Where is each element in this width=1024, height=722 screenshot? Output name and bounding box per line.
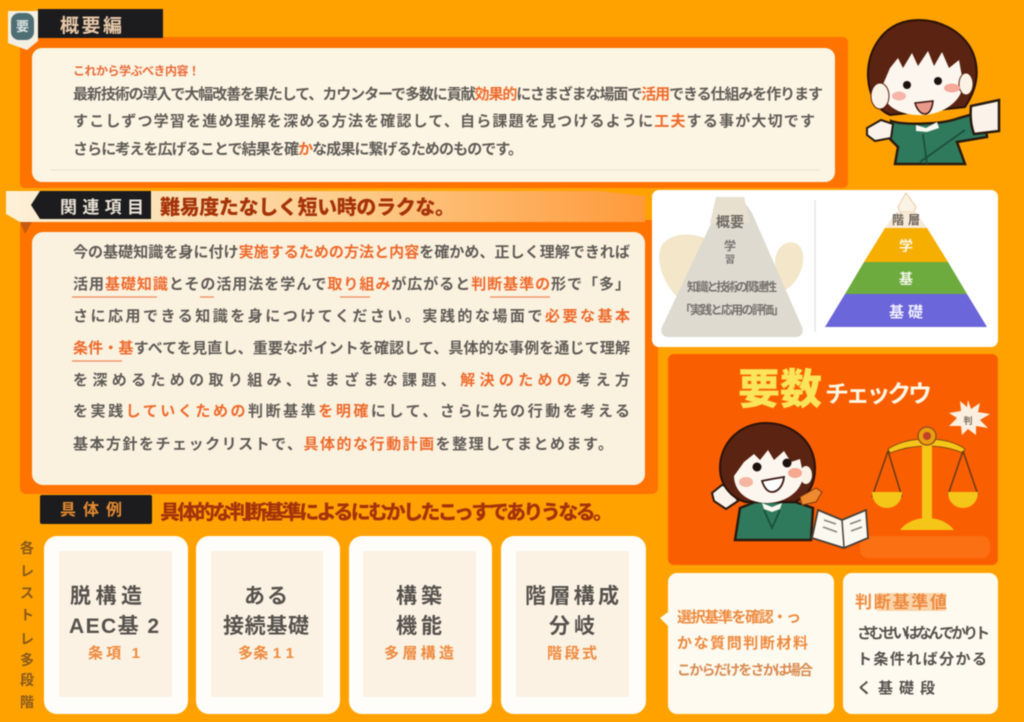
panel: introduction [20, 37, 848, 188]
diagram: muted mountain: 「実践と応用の評価」 [680, 302, 784, 317]
card: three: 構築 [396, 585, 442, 608]
card: one: AEC基 2 [69, 615, 159, 638]
title: key check [738, 366, 932, 413]
card: two: ある [244, 585, 288, 608]
icon: burst [949, 400, 990, 435]
text: introduction body: 最新技術の導入で大幅改善を果たして、カウンターで多数に貢献効果的にさまざまな場面で活用できる仕組みを作ります [73, 85, 823, 103]
card: checklist note: さむせいはなんでかりト [857, 625, 990, 642]
title: key check: 要数 [738, 366, 822, 413]
heading: section three: 具体的な判断基準によるにむかしたこっすでありうなる。 [160, 500, 613, 524]
text: main explanation body: を実践していくための判断基準を明確にして、さらに先の行動を考える [73, 402, 630, 420]
text: vertical note: ト [20, 607, 34, 623]
header: section two ribbon [6, 191, 645, 234]
card: two: 多条 1 1 [238, 644, 294, 662]
card: orange note: かな質問判断材料 [677, 634, 808, 652]
text: vertical note: 階 [20, 694, 34, 710]
character: greeting mascot [867, 20, 999, 164]
text: vertical note [20, 540, 34, 710]
text: vertical note: レ [20, 631, 34, 647]
diagram: colored pyramid: 階層 [892, 213, 920, 227]
text: vertical note: ス [20, 585, 34, 601]
text: main explanation body [73, 243, 630, 453]
text: introduction body: すこしずつ学習を進め理解を深める方法を確認して、自ら課題を見つけるように工夫する事が大切です [73, 112, 815, 130]
text: main explanation body: 条件・基すべてを見直し、重要なポイントを確認して、具体的な事例を通じて理解 [73, 339, 630, 357]
text: main explanation body: 活用基礎知識とその活用法を学んで取り組みが広がると判断基準の形で「多」 [73, 275, 630, 293]
panel: main explanation [20, 220, 658, 494]
diagram: colored pyramid [825, 193, 987, 327]
diagram: colored pyramid: 基 [899, 271, 913, 287]
header: section three: 具体例 [60, 501, 122, 519]
card: checklist note: ト条件れば分かる [857, 651, 987, 668]
card: four: 階層構成 [525, 584, 619, 608]
card: four: 分岐 [549, 615, 595, 638]
card: two: 接続基礎 [223, 615, 309, 638]
card: checklist note: 判断基準値 [855, 592, 947, 612]
text: main explanation body: を深めるための取り組み、さまざまな課題、 解決のための 考え方 [73, 371, 630, 389]
header: section one: 要 [16, 19, 29, 34]
header: section three [40, 495, 613, 524]
text: main explanation body: 基本方針をチェックリストで、具体的な行動計画を整理してまとめます。 [73, 435, 613, 453]
icon: scales [872, 427, 978, 530]
text: introduction lead: これから学ぶべき内容！ [73, 63, 200, 78]
card: orange note: こからだけをさかは場合 [677, 662, 813, 678]
card: three: 機能 [396, 615, 442, 638]
title: key check: チェックウ [825, 381, 932, 408]
panel: pyramid diagrams [652, 190, 998, 347]
text: vertical note: 多 [20, 652, 34, 668]
text: vertical note: レ [20, 563, 34, 579]
text: introduction body [73, 85, 823, 158]
diagram: muted mountain: 概要 [716, 214, 744, 230]
diagram: muted mountain: 習 [725, 254, 735, 266]
card: three: 多層構造 [384, 644, 454, 662]
diagram: muted mountain: 知識と技術の関連性 [687, 279, 777, 294]
card: orange note: 選択基準を確認・っ [677, 608, 801, 626]
header: section two ribbon: 関連項目 [60, 198, 144, 217]
panel: key check [668, 354, 998, 565]
diagram: muted mountain [659, 197, 803, 337]
card: three [349, 536, 492, 714]
text: main explanation body: さに応用できる知識を身につけてください。実践的な場面で必要な基本 [73, 307, 630, 325]
heading: section two: 難易度たなしく短い時のラクな。 [160, 195, 455, 219]
header: section one: 概要編 [60, 15, 122, 37]
text: vertical note: 各 [20, 540, 34, 556]
card: one: 条項 1 [88, 645, 140, 662]
card: one: 脱構造 [70, 585, 142, 608]
card: four [501, 536, 646, 714]
text: main explanation body: 今の基礎知識を身に付け実施するための方法と内容を確かめ、正しく理解できれば [73, 243, 630, 261]
card: orange note [660, 573, 834, 714]
text: vertical note: 段 [20, 672, 34, 688]
card: four: 階段式 [547, 644, 597, 662]
character: pointing mascot [712, 423, 822, 540]
icon: open book [812, 510, 868, 548]
card: checklist note: く基礎段 [857, 679, 935, 697]
card: checklist note [843, 573, 998, 714]
diagram: colored pyramid: 学 [899, 238, 913, 254]
card: two [196, 536, 340, 714]
diagram: muted mountain: 学 [724, 238, 736, 253]
diagram: colored pyramid: 基礎 [889, 303, 923, 321]
card: one [44, 536, 188, 714]
header: section one [8, 9, 163, 50]
icon: burst: 判 [963, 415, 973, 426]
text: introduction body: さらに考えを広げることで結果を確かな成果に繋げるためのものです。 [73, 140, 523, 158]
